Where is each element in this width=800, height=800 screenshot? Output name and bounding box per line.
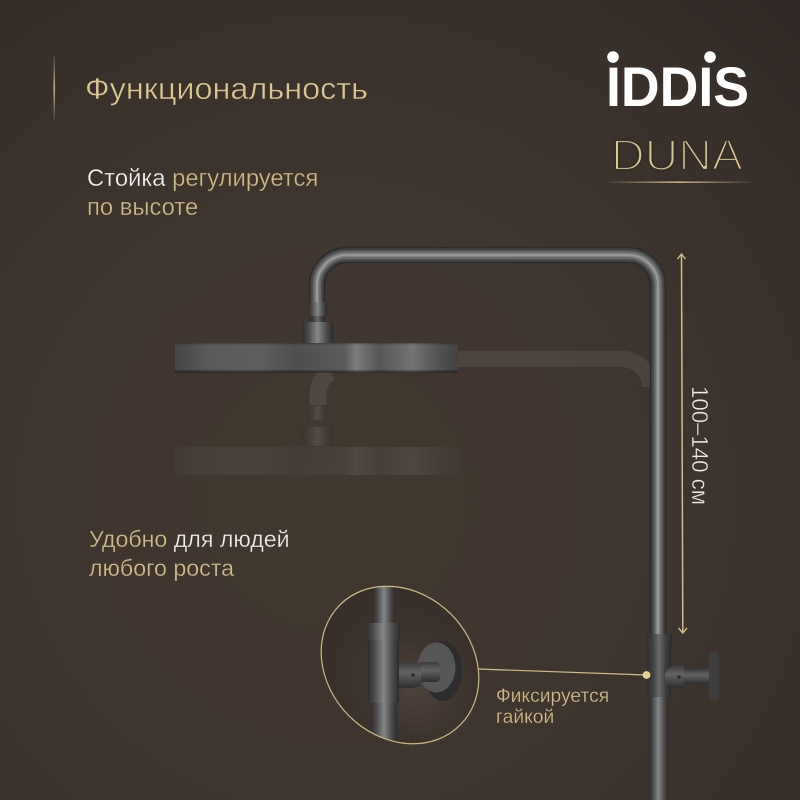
lens outline — [289, 554, 511, 776]
body — [368, 640, 399, 703]
knob disc — [709, 652, 720, 700]
logo: iddis: IDDIS — [606, 55, 749, 118]
text block: height adjustment: по высоте — [87, 194, 198, 221]
ghost head connector — [302, 406, 333, 446]
lens fill — [289, 554, 511, 776]
text block: comfort: любого роста — [89, 555, 234, 581]
ghost arm — [458, 359, 650, 387]
upper rod — [373, 585, 395, 625]
enlarged detail — [366, 585, 462, 745]
logo underline — [603, 182, 755, 183]
callout pointer — [478, 669, 650, 679]
accent line: heading — [54, 53, 55, 123]
front disc — [418, 642, 456, 692]
callout text — [496, 686, 609, 728]
collar — [646, 634, 672, 647]
back disc — [428, 641, 462, 701]
height dimension arrow — [678, 254, 687, 633]
lower rod — [371, 703, 397, 742]
text block: comfort: Удобно для людей — [89, 526, 290, 552]
ghost drop pipe — [318, 372, 330, 405]
heading: Функциональность — [85, 71, 368, 106]
series name: duna: DUNA — [611, 131, 744, 180]
shower head connector — [302, 302, 333, 343]
shower arm — [317, 255, 658, 640]
lower pipe — [649, 696, 668, 800]
ghost head — [175, 447, 458, 475]
magnifier callout — [320, 586, 480, 744]
shower head — [175, 343, 458, 372]
callout text: Фиксируется — [496, 686, 609, 707]
ghost shower: lowered position — [175, 359, 650, 475]
diverter body — [647, 647, 671, 697]
text block: height adjustment: Стойка регулируется — [87, 165, 318, 192]
height label: 100–140 см — [687, 386, 713, 505]
side outlet — [665, 665, 684, 688]
side stem — [398, 662, 440, 688]
lower pipe and diverter — [646, 634, 720, 800]
collar — [366, 623, 400, 640]
callout text: гайкой — [496, 707, 554, 728]
